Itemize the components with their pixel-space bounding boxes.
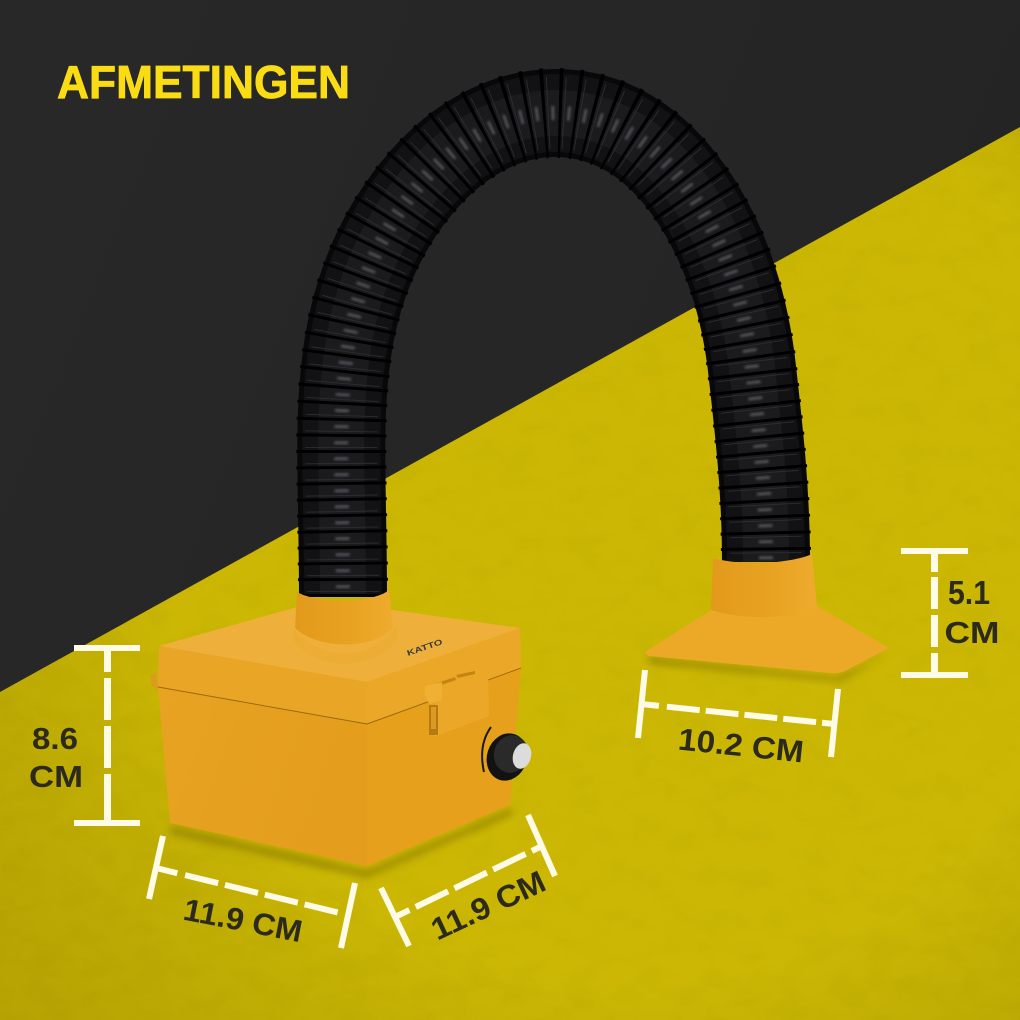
- label 11.9 CM right: 11.9 CM: [426, 864, 551, 947]
- label 5.1 CM: CM: [944, 615, 1000, 650]
- label 11.9 CM left: 11.9 CM: [181, 892, 305, 949]
- nozzle collar: [711, 554, 817, 617]
- box lid right face: [367, 628, 521, 724]
- label 5.1 CM: [944, 574, 1000, 650]
- label 5.1 CM: 5.1: [948, 574, 990, 611]
- product: fume extractor: [150, 113, 889, 878]
- box lower right face: [367, 668, 521, 866]
- collar on box: [295, 590, 393, 644]
- label 8.6 CM: CM: [29, 759, 83, 794]
- left hinge tab: [150, 672, 158, 690]
- box lid left face: [158, 646, 367, 724]
- label 8.6 CM: 8.6: [32, 721, 78, 756]
- title: AFMETINGEN: [57, 56, 350, 108]
- label 8.6 CM: [29, 721, 83, 794]
- dial scale: [482, 727, 491, 772]
- dimension: depth 11.9 cm right: [381, 815, 555, 947]
- brand label: KATTO: [406, 637, 444, 658]
- latch: [425, 668, 489, 737]
- dimension: height 5.1 cm: [901, 548, 1000, 678]
- flexible hose: [341, 113, 766, 597]
- lid seam: [158, 668, 521, 724]
- label 10.2 CM: 10.2 CM: [676, 722, 805, 769]
- collar flare: [293, 626, 397, 664]
- nozzle shadow: [648, 652, 889, 682]
- control knob: [481, 728, 534, 786]
- dimension: depth 11.9 cm left: [149, 836, 355, 949]
- box lower left face: [158, 687, 367, 866]
- dimension: width 10.2 cm: [638, 670, 838, 769]
- nozzle flange: [645, 606, 889, 673]
- dimension: height 8.6 cm: [29, 645, 140, 826]
- box shadow: [170, 808, 512, 878]
- box lid top: [159, 607, 520, 682]
